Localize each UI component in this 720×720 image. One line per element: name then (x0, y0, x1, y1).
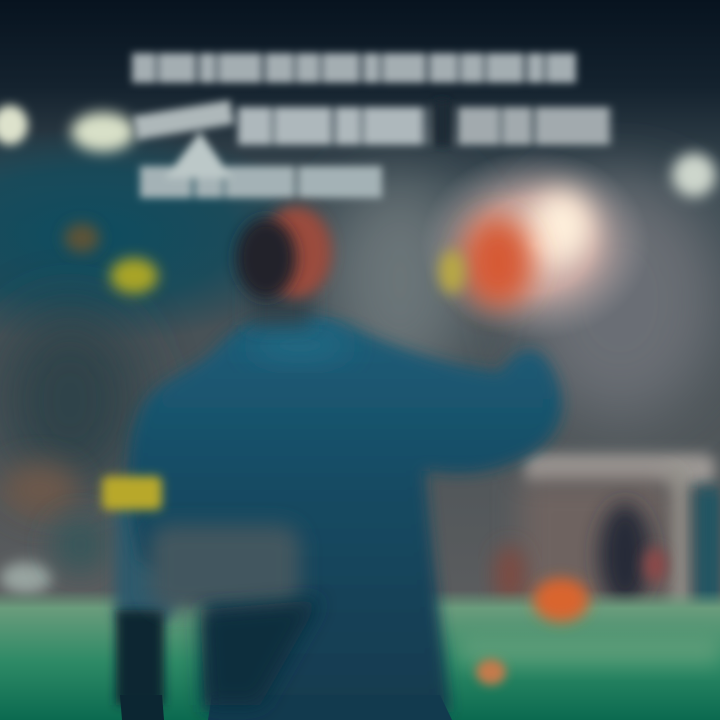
player figure (102, 206, 562, 720)
player sleeve (115, 500, 175, 620)
floodlights (0, 105, 716, 197)
player shadow fold (200, 600, 320, 705)
title: illegible blurred headline (132, 68, 612, 182)
player shoulder sheen (250, 331, 350, 359)
player base (208, 695, 452, 720)
pitch (0, 590, 720, 720)
player torso and arm (128, 314, 562, 712)
player legs (116, 610, 164, 720)
player back panel (150, 525, 300, 610)
yellow highlights left (64, 223, 158, 294)
orange balls on pitch (476, 578, 589, 685)
glowing ball (420, 150, 650, 340)
captain armband (102, 476, 162, 510)
player head (236, 206, 332, 298)
goal and distant players (494, 454, 720, 615)
player neck (250, 285, 310, 325)
